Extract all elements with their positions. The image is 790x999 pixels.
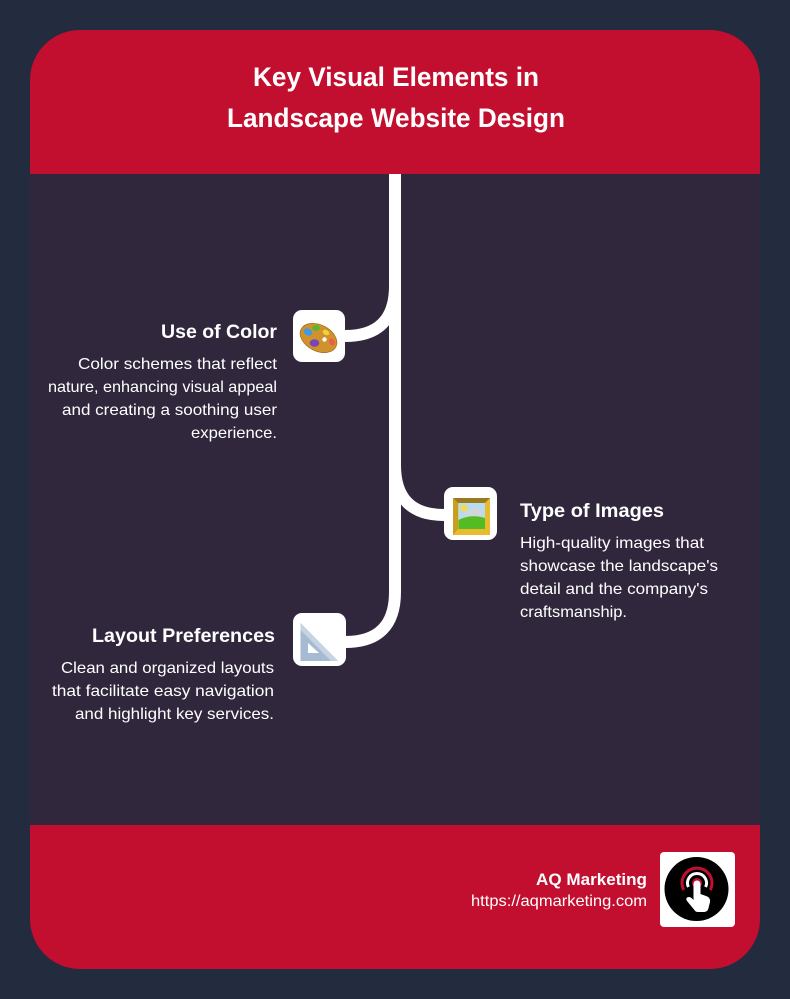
title [227, 62, 565, 133]
title: Landscape Website Design [227, 103, 565, 133]
item: layout preferences [52, 613, 346, 723]
timeline connector [345, 174, 444, 642]
header band [30, 30, 760, 174]
icon: artist palette [293, 310, 345, 362]
description [48, 356, 278, 442]
description: showcase the landscape's [520, 558, 718, 575]
heading: Use of Color [161, 322, 278, 343]
brand url: https://aqmarketing.com [471, 893, 647, 910]
brand name: AQ Marketing [536, 870, 647, 889]
description: that facilitate easy navigation [52, 683, 274, 700]
description: detail and the company's [520, 581, 708, 598]
description: Color schemes that reflect [78, 356, 278, 373]
title: Key Visual Elements in [253, 62, 539, 92]
description: High-quality images that [520, 535, 705, 552]
description [520, 535, 718, 621]
description: Clean and organized layouts [61, 660, 274, 677]
description: craftsmanship. [520, 604, 627, 621]
heading: Layout Preferences [92, 626, 275, 647]
footer band [30, 825, 760, 969]
description: and creating a soothing user [62, 402, 278, 419]
icon: triangular ruler [293, 613, 346, 666]
description [52, 660, 274, 723]
icon: framed picture [444, 487, 497, 540]
item: type of images [444, 487, 718, 621]
description: nature, enhancing visual appeal [48, 379, 277, 396]
description: experience. [191, 425, 277, 442]
heading: Type of Images [520, 501, 664, 522]
description: and highlight key services. [75, 706, 274, 723]
footer brand [471, 852, 735, 927]
icon: AQ Marketing logo [660, 852, 735, 927]
content panel [30, 174, 760, 825]
item: use of color [48, 310, 345, 442]
